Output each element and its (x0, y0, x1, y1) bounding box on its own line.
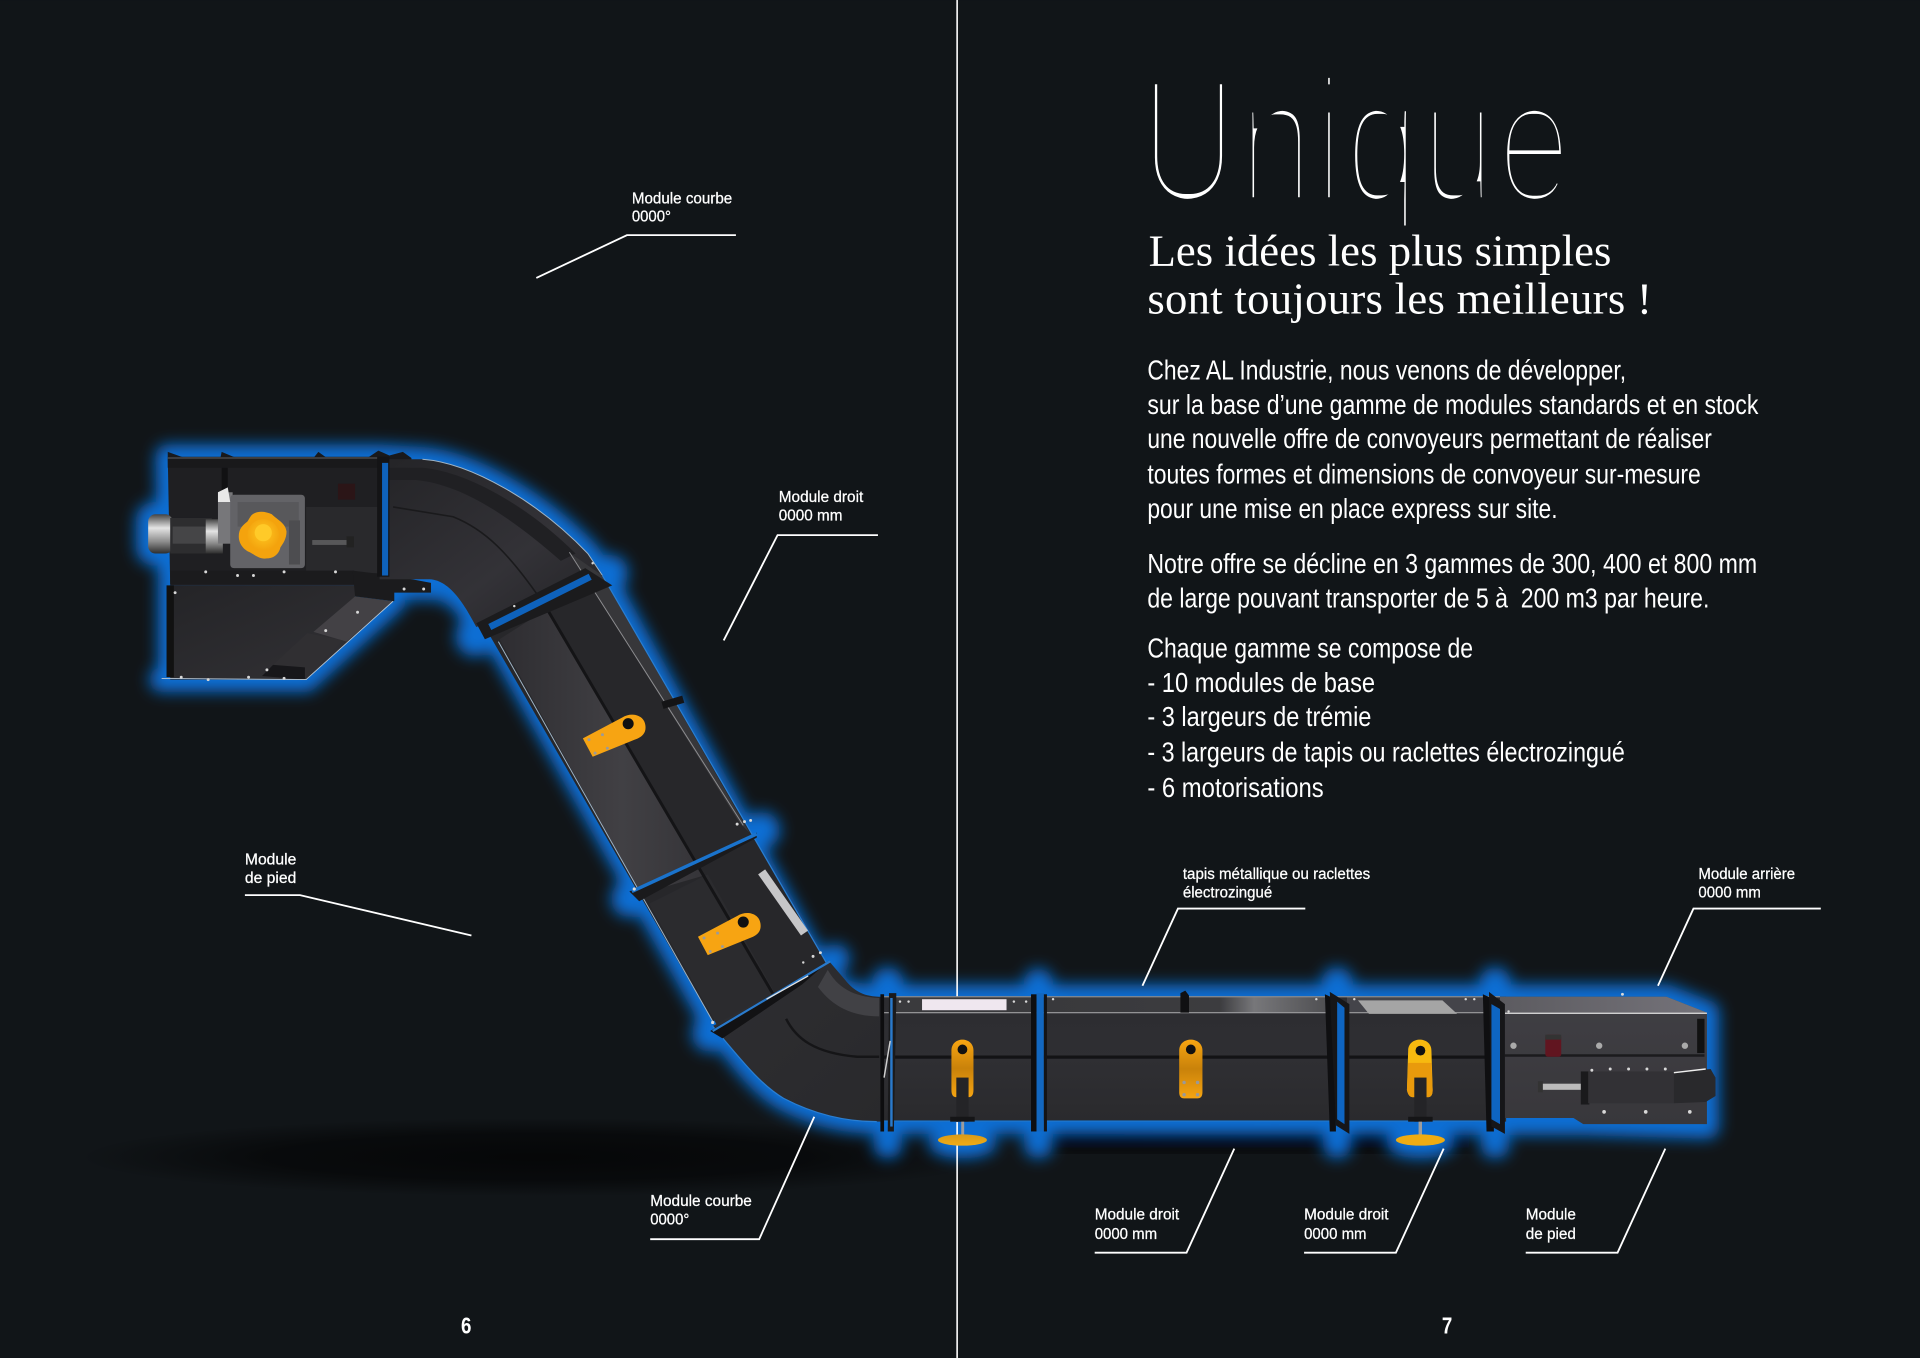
horizontal modules (882, 991, 1506, 1122)
text block: ranges: de large pouvant transporter de 5 à 200 m3 par heure. (1147, 582, 1709, 613)
callout: module arriere (1658, 866, 1821, 986)
support plate at hopper top (353, 571, 431, 601)
page number 7: 7 (1442, 1312, 1452, 1338)
callout: tapis metallique (1142, 866, 1370, 986)
callout: module arriere: 0000 mm (1698, 885, 1761, 902)
callout: tapis metallique: tapis métallique ou raclettes (1183, 866, 1370, 883)
callout: module de pied right: Module (1526, 1207, 1576, 1224)
text block: introduction: toutes formes et dimensions de convoyeur sur-mesure (1147, 459, 1701, 490)
callout: module de pied right: de pied (1526, 1226, 1576, 1243)
subtitle: sont toujours les meilleurs ! (1147, 273, 1652, 323)
text block: ranges (1147, 548, 1757, 613)
upper curved module (380, 459, 602, 627)
text block: composition list (1147, 633, 1625, 803)
callout: module courbe bottom (650, 1117, 814, 1239)
callout: module droit incline: 0000 mm (779, 507, 842, 524)
callout: module de pied left (245, 852, 471, 936)
head module with motor (148, 451, 431, 681)
rear module (1500, 997, 1716, 1124)
text block: introduction: Chez AL Industrie, nous venons de développer, (1147, 355, 1626, 386)
callout: tapis metallique: électrozingué (1183, 885, 1272, 902)
text block: composition list: - 6 motorisations (1147, 772, 1324, 803)
gearbox (218, 487, 305, 568)
blue glow around conveyor (144, 457, 1707, 1158)
text block: introduction (1147, 355, 1759, 524)
tensioner (1538, 1069, 1716, 1105)
callout: module droit 1 (1095, 1149, 1234, 1253)
text block: composition list: - 3 largeurs de trémie (1147, 701, 1371, 732)
motor (148, 514, 223, 553)
text block: composition list: - 3 largeurs de tapis ou raclettes électrozingué (1147, 737, 1625, 768)
icon: orange motor knob (239, 512, 287, 559)
callout: module droit incline: Module droit (779, 489, 864, 506)
callout: module arriere: Module arrière (1698, 866, 1795, 883)
callout: module droit incline (724, 489, 878, 640)
inspection window (922, 999, 1007, 1010)
callout: module courbe top (536, 190, 736, 278)
text block: introduction: une nouvelle offre de convoyeurs permettant de réaliser (1147, 423, 1712, 454)
subtitle: Les idées les plus simples (1149, 226, 1611, 276)
orange bracket on inclined module (583, 715, 646, 757)
callout: module courbe top: Module courbe (632, 190, 732, 207)
subtitle (1147, 226, 1652, 323)
callout: module de pied left: Module (245, 852, 296, 869)
callout: module droit 2 (1304, 1149, 1444, 1253)
flanges on horizontal section (880, 992, 1505, 1134)
text block: composition list: - 10 modules de base (1147, 667, 1375, 698)
yellow bracket and foot 3 (1396, 1040, 1445, 1146)
orange bracket and foot 1 (938, 1040, 987, 1146)
text block: introduction: sur la base d’une gamme de modules standards et en stock (1147, 389, 1759, 420)
flange: head to curve (377, 457, 389, 577)
inclined module (490, 552, 829, 1026)
flanges on incline (476, 568, 830, 1038)
callout: module courbe bottom: Module courbe (650, 1193, 752, 1210)
orange bracket 2 (1179, 1040, 1202, 1098)
callout: module droit 2: Module droit (1304, 1207, 1389, 1224)
text block: composition list: Chaque gamme se compose de (1147, 633, 1473, 664)
page fold line (956, 0, 958, 1358)
text block: introduction: pour une mise en place express sur site. (1147, 493, 1558, 524)
callout: module droit 1: Module droit (1095, 1207, 1180, 1224)
title: Unique (1139, 43, 1572, 239)
callout: module courbe bottom: 0000° (650, 1212, 689, 1229)
callout: module de pied right (1526, 1149, 1665, 1253)
floor shadow (80, 1118, 1469, 1196)
text block: ranges: Notre offre se décline en 3 gammes de 300, 400 et 800 mm (1147, 548, 1757, 579)
page number 6: 6 (461, 1312, 471, 1338)
inspection window (1358, 1000, 1457, 1014)
callout: module droit 2: 0000 mm (1304, 1226, 1367, 1243)
conveyor (148, 451, 1716, 1146)
callout: module de pied left: de pied (245, 870, 296, 887)
callout: module droit 1: 0000 mm (1095, 1226, 1157, 1243)
orange bracket on inclined module, lower (698, 913, 761, 955)
callout: module courbe top: 0000° (632, 209, 671, 226)
lower curved module (713, 962, 882, 1122)
